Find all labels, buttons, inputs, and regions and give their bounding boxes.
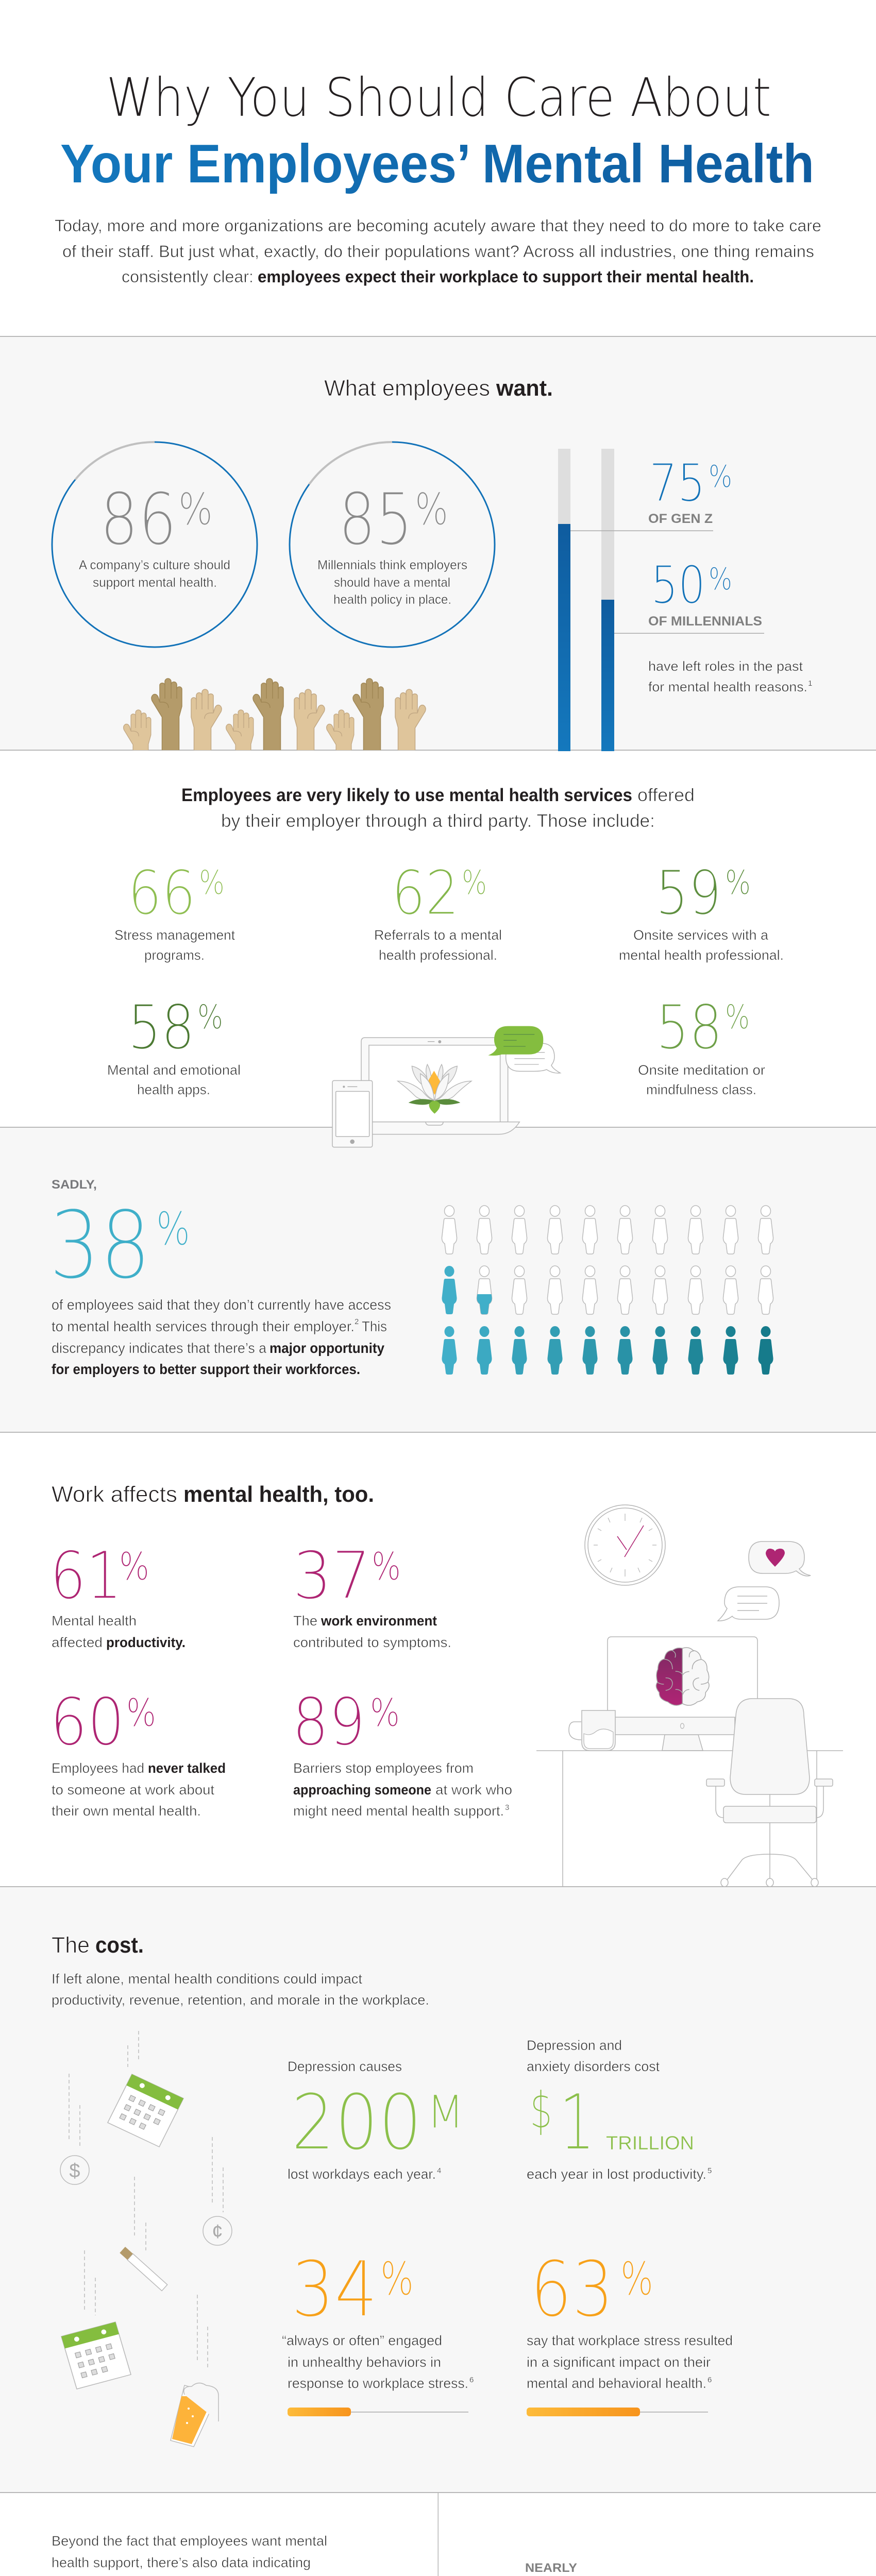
donut: 85 percent: %	[415, 484, 448, 535]
heading: mental health, too.	[183, 1482, 374, 1507]
stat: 89 percent: might need mental health support.	[293, 1803, 504, 1819]
stat: 61 percent: Mental health	[52, 1613, 137, 1629]
icon: text speech bubble	[718, 1587, 779, 1621]
stat: 66 percent: Stress management	[114, 927, 235, 943]
text block	[52, 1297, 391, 1377]
stat: 37 percent: work environment	[321, 1613, 437, 1629]
stat: 62 percent: health professional.	[379, 947, 497, 963]
stat: 34 percent	[282, 2245, 474, 2416]
icon: cigarette	[120, 2247, 167, 2291]
icon: dollar coin: $	[69, 2160, 80, 2182]
stat: 200M lost workdays	[288, 2059, 464, 2182]
icon: half magenta brain	[656, 1648, 709, 1705]
text block: discrepancy indicates that there’s a	[52, 1340, 266, 1356]
intro text: employees expect their workplace to support their mental health.	[258, 267, 754, 286]
heading: cost.	[95, 1933, 144, 1958]
stat: 58 percent apps: Mental and emotional	[107, 1062, 241, 1078]
title: Why You Should Care About	[106, 67, 771, 129]
stat: 60 percent: %	[126, 1691, 156, 1735]
heading: Work affects	[52, 1482, 177, 1507]
panel: the cost	[52, 1933, 733, 2447]
stat: 66 percent	[114, 857, 235, 963]
intro text	[55, 216, 821, 286]
stat: 89 percent: Barriers stop employees from	[293, 1760, 474, 1776]
stat: 59 percent: mental health professional.	[619, 947, 784, 963]
icon: heart speech bubble	[749, 1541, 811, 1576]
stat: 38 percent: %	[156, 1202, 190, 1256]
progress bar	[527, 2408, 708, 2416]
stat: 75 percent gen z: 75	[649, 453, 705, 513]
text block: 2	[355, 1317, 359, 1326]
icon: cent coin	[203, 2216, 232, 2245]
donut: 85 percent: Millennials think employers	[317, 558, 467, 572]
donut: 86 percent: support mental health.	[93, 575, 217, 590]
stat: 50 percent millennials	[648, 555, 762, 629]
stat: 200M lost workdays: 200	[291, 2078, 422, 2167]
stat: 60 percent: their own mental health.	[52, 1803, 201, 1819]
donut: 86 percent: %	[178, 484, 213, 535]
stat: 63 percent: in a significant impact on their	[527, 2354, 711, 2370]
progress bar	[288, 2408, 468, 2416]
stat: 2 out of 3	[530, 2572, 668, 2576]
label: nearly: NEARLY	[525, 2561, 577, 2575]
stat: 37 percent: 37	[293, 1537, 371, 1614]
heading: The	[52, 1933, 90, 1958]
stat: 60 percent: never talked	[148, 1760, 226, 1776]
stat: 34 percent: in unhealthy behaviors in	[288, 2354, 441, 2370]
stat: 75 percent gen z: %	[709, 459, 732, 494]
stat: 34 percent: 34	[291, 2245, 378, 2334]
stat: 50 percent millennials: %	[709, 561, 732, 597]
text block: to mental health services through their employer.	[52, 1318, 355, 1334]
stat: 59 percent: %	[725, 864, 751, 902]
stat: 38 percent: 38	[49, 1191, 151, 1300]
stat: 1 trillion: anxiety disorders cost	[527, 2059, 660, 2074]
stat: 37 percent: The	[293, 1613, 317, 1629]
stat: 1 trillion	[527, 2038, 712, 2182]
text block: This	[362, 1318, 387, 1334]
donut: 86 percent	[52, 442, 257, 647]
title	[60, 67, 814, 194]
icon: desk with monitor, brain, mug and chair	[536, 1637, 843, 1887]
stat: 66 percent: 66	[128, 857, 196, 928]
stat: 61 percent: productivity.	[106, 1635, 186, 1650]
stat: 62 percent: %	[462, 864, 487, 902]
stat: 63 percent: %	[620, 2252, 653, 2306]
stat: 58 percent apps: 58	[128, 992, 195, 1063]
title: Your Employees’ Mental Health	[60, 133, 814, 194]
stat: 200M lost workdays: lost workdays each year.	[288, 2166, 436, 2182]
text block: for employers to better support their workforces.	[52, 1361, 360, 1377]
stat: 75 percent gen z: OF GEN Z	[648, 512, 713, 526]
text block: data on better support	[52, 2533, 327, 2576]
stat: 37 percent	[293, 1537, 451, 1650]
text block: of employees said that they don’t currently have access	[52, 1297, 391, 1313]
stat: 61 percent	[50, 1537, 186, 1650]
icon: dollar coin	[60, 2156, 89, 2184]
heading: What employees	[324, 376, 490, 401]
stat: 34 percent: response to workplace stress.	[288, 2376, 468, 2391]
stat: 62 percent: 62	[392, 857, 459, 928]
stat: 60 percent	[50, 1684, 226, 1819]
stat: 61 percent: affected	[52, 1635, 103, 1650]
panel: win-win	[52, 2493, 759, 2576]
icon: calendar top	[108, 2074, 183, 2147]
stat: 1 trillion: Depression and	[527, 2038, 622, 2053]
stat: 89 percent: 3	[505, 1803, 509, 1812]
panel: mental health services	[107, 785, 784, 1147]
stat: 1 trillion: $	[530, 2081, 552, 2140]
stat: 37 percent: contributed to symptoms.	[293, 1635, 451, 1650]
intro text: If left alone, mental health conditions could impact	[52, 1971, 362, 1987]
text block: major opportunity	[269, 1340, 384, 1356]
stat: 62 percent	[374, 857, 502, 963]
stat: 58 percent apps	[107, 992, 241, 1097]
panel: sadly 38 percent	[49, 1178, 773, 1377]
stat: 89 percent	[292, 1684, 512, 1819]
stat: 63 percent: mental and behavioral health.	[527, 2376, 706, 2391]
donut: 86 percent: A company’s culture should	[79, 558, 230, 572]
stat: 89 percent: approaching someone	[293, 1782, 431, 1798]
icon: calendar bottom	[61, 2322, 131, 2389]
stat: 1 trillion: each year in lost productivity.	[527, 2166, 706, 2182]
heading	[52, 1933, 144, 1958]
text: left roles: for mental health reasons.	[648, 679, 807, 694]
stat: 63 percent: say that workplace stress resulted	[527, 2333, 733, 2348]
stat: 1 trillion: 1	[559, 2078, 595, 2167]
stat: 1 trillion: TRILLION	[606, 2132, 694, 2154]
icon: laptop, phone, lotus and chat bubbles	[332, 1026, 560, 1147]
stat: 50 percent millennials: OF MILLENNIALS	[648, 614, 762, 629]
donut: 85 percent: 85	[339, 478, 413, 561]
stat: 60 percent: 60	[50, 1684, 125, 1760]
heading	[181, 785, 695, 831]
stat: 66 percent: %	[199, 864, 225, 902]
stat: 200M lost workdays: Depression causes	[288, 2059, 402, 2074]
stat: 58 percent apps: %	[197, 998, 223, 1037]
stat: 63 percent: 63	[530, 2245, 614, 2334]
icon: raised hands	[123, 678, 426, 750]
intro text: consistently clear:	[122, 267, 254, 286]
stat: 58 percent meditation	[638, 992, 765, 1097]
stat: 1 trillion: 5	[707, 2166, 712, 2175]
stat: 61 percent: %	[119, 1545, 149, 1589]
heading: by their employer through a third party. Those include:	[221, 811, 655, 831]
stat: 59 percent	[619, 857, 784, 963]
panel: work affects mental health	[50, 1482, 843, 1887]
donut: 86 percent: 86	[100, 478, 177, 561]
heading	[52, 1482, 374, 1507]
stat: 60 percent: to someone at work about	[52, 1782, 215, 1798]
stat: 59 percent: 59	[655, 857, 721, 928]
stat: 34 percent: 6	[469, 2376, 474, 2384]
text block: data on better support: health support, there’s also data indicating	[52, 2555, 311, 2570]
text: left roles: have left roles in the past	[648, 658, 803, 674]
stat: 63 percent	[527, 2245, 733, 2416]
heading: want.	[496, 376, 553, 401]
donut: 85 percent	[290, 442, 495, 647]
stat: 58 percent meditation: 58	[656, 992, 722, 1063]
heading: offered	[637, 785, 695, 805]
stat: 58 percent apps: health apps.	[137, 1082, 210, 1097]
label: SADLY,	[52, 1178, 97, 1192]
donut: 85 percent: health policy in place.	[333, 592, 451, 607]
stat: 34 percent: “always or often” engaged	[282, 2333, 442, 2348]
stat: 66 percent: programs.	[144, 947, 205, 963]
stat: 200M lost workdays: 4	[437, 2166, 441, 2175]
stat: 89 percent: at work who	[435, 1782, 512, 1798]
stat: 50 percent millennials: 50	[651, 555, 705, 615]
text block: data on better support: Beyond the fact that employees want mental	[52, 2533, 327, 2549]
pictogram: 100 people	[442, 1206, 773, 1375]
icon: cent coin: ¢	[212, 2221, 223, 2243]
falling dashed lines	[69, 2031, 223, 2370]
stat: 63 percent: 6	[707, 2376, 712, 2384]
stat: 37 percent: %	[372, 1545, 401, 1589]
stat: 89 percent: %	[370, 1691, 400, 1735]
stat: 89 percent: 89	[292, 1684, 365, 1760]
donut: 85 percent: should have a mental	[334, 575, 450, 590]
text: left roles	[648, 658, 812, 694]
icon: wall clock	[585, 1505, 665, 1585]
stat: 58 percent meditation: %	[725, 998, 750, 1037]
stat: 61 percent: 61	[50, 1537, 122, 1614]
panel: what employees want	[52, 380, 812, 751]
intro text: of their staff. But just what, exactly, do their populations want? Across all industries, one thing remains	[62, 242, 814, 261]
heading: Employees are very likely to use mental health services	[181, 785, 632, 805]
bar chart: gen z and millennials	[558, 449, 764, 751]
stat: 58 percent meditation: Onsite meditation or	[638, 1062, 765, 1078]
intro text	[52, 1971, 429, 2008]
stat: 200M lost workdays: M	[427, 2086, 464, 2139]
intro text: productivity, revenue, retention, and morale in the workplace.	[52, 1992, 429, 2008]
stat: 75 percent gen z	[648, 453, 732, 526]
stat: 60 percent: Employees had	[52, 1760, 144, 1776]
text: left roles: 1	[808, 679, 812, 688]
stat: 34 percent: %	[380, 2252, 414, 2306]
stat: 59 percent: Onsite services with a	[633, 927, 769, 943]
stat: 62 percent: Referrals to a mental	[374, 927, 502, 943]
icon: beer mug	[171, 2383, 218, 2447]
intro text: Today, more and more organizations are becoming acutely aware that they need to do more to take care	[55, 216, 821, 235]
stat: 58 percent meditation: mindfulness class.	[646, 1082, 756, 1097]
